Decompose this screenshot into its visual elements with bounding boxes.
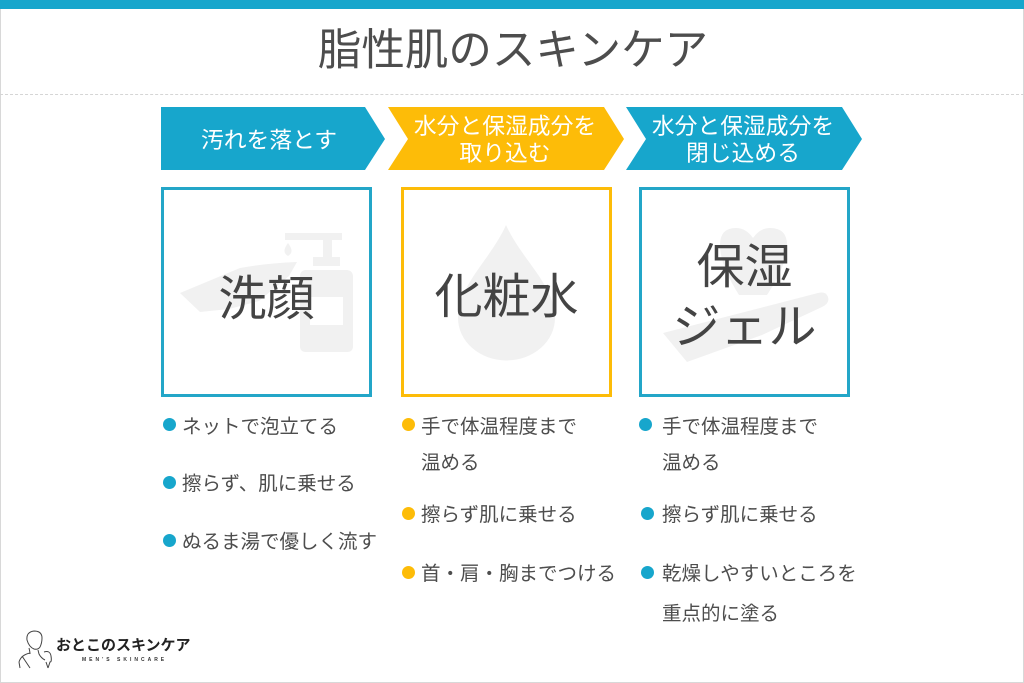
bullet [163,418,176,431]
arrow heading: step 2 [414,113,596,166]
text: 温める [421,452,480,474]
arrow: step 2 [388,107,624,170]
arrow heading: step 1: 汚れを落とす [201,127,337,153]
label: 保湿ジェル [672,241,816,354]
list: face wash points [163,416,377,553]
text: ネットで泡立てる [182,416,338,438]
bullet [163,534,176,547]
logo wordmark: おとこのスキンケア [56,637,191,654]
bullet [639,418,652,431]
text: 擦らず肌に乗せる [421,504,577,526]
arrow: step 1 [161,107,385,170]
top accent bar [0,0,1024,9]
bullet [402,507,415,520]
bullet [402,566,415,579]
frame: face wash [161,187,372,397]
arrow heading: step 3 [652,113,834,166]
label: 保湿ジェル: 保湿 [696,241,792,294]
text: 首・肩・胸までつける [421,563,616,585]
icon: gel on hand [664,228,828,362]
title: 脂性肌のスキンケア [318,27,708,75]
logo tagline: MEN'S SKINCARE [82,657,167,663]
arrow heading: step 3: 閉じ込める [686,140,800,166]
bullet [163,476,176,489]
text: 手で体温程度まで [421,416,577,438]
bullet [641,507,654,520]
text: 重点的に塗る [662,603,779,625]
label: 保湿ジェル: ジェル [672,301,816,354]
icon: man line drawing [18,630,52,668]
icon: water drop [458,226,555,360]
icon: soap pump and hand [180,233,353,352]
bullet [641,566,654,579]
list: lotion points [402,416,616,585]
text: 温める [662,452,721,474]
text: ぬるま湯で優しく流す [182,531,377,553]
text [662,416,818,474]
frame: gel [639,187,850,397]
text: 擦らず肌に乗せる [662,504,818,526]
label: 洗顔: 洗顔 [218,273,314,326]
text [421,416,577,474]
bullet [402,418,415,431]
panel: face wash [180,233,353,352]
label: 化粧水: 化粧水 [434,271,578,324]
panel: lotion [434,226,578,360]
text: 乾燥しやすいところを [662,563,857,585]
arrow heading: step 3: 水分と保湿成分を [652,113,834,139]
logo [18,630,191,668]
text: 手で体温程度まで [662,416,818,438]
arrow heading: step 2: 水分と保湿成分を [414,113,596,139]
arrow heading: step 2: 取り込む [459,140,551,166]
text: 擦らず、肌に乗せる [182,473,356,495]
arrow: step 3 [626,107,862,170]
panel: gel [664,228,828,362]
frame: lotion [401,187,612,397]
list: gel points [639,416,857,625]
